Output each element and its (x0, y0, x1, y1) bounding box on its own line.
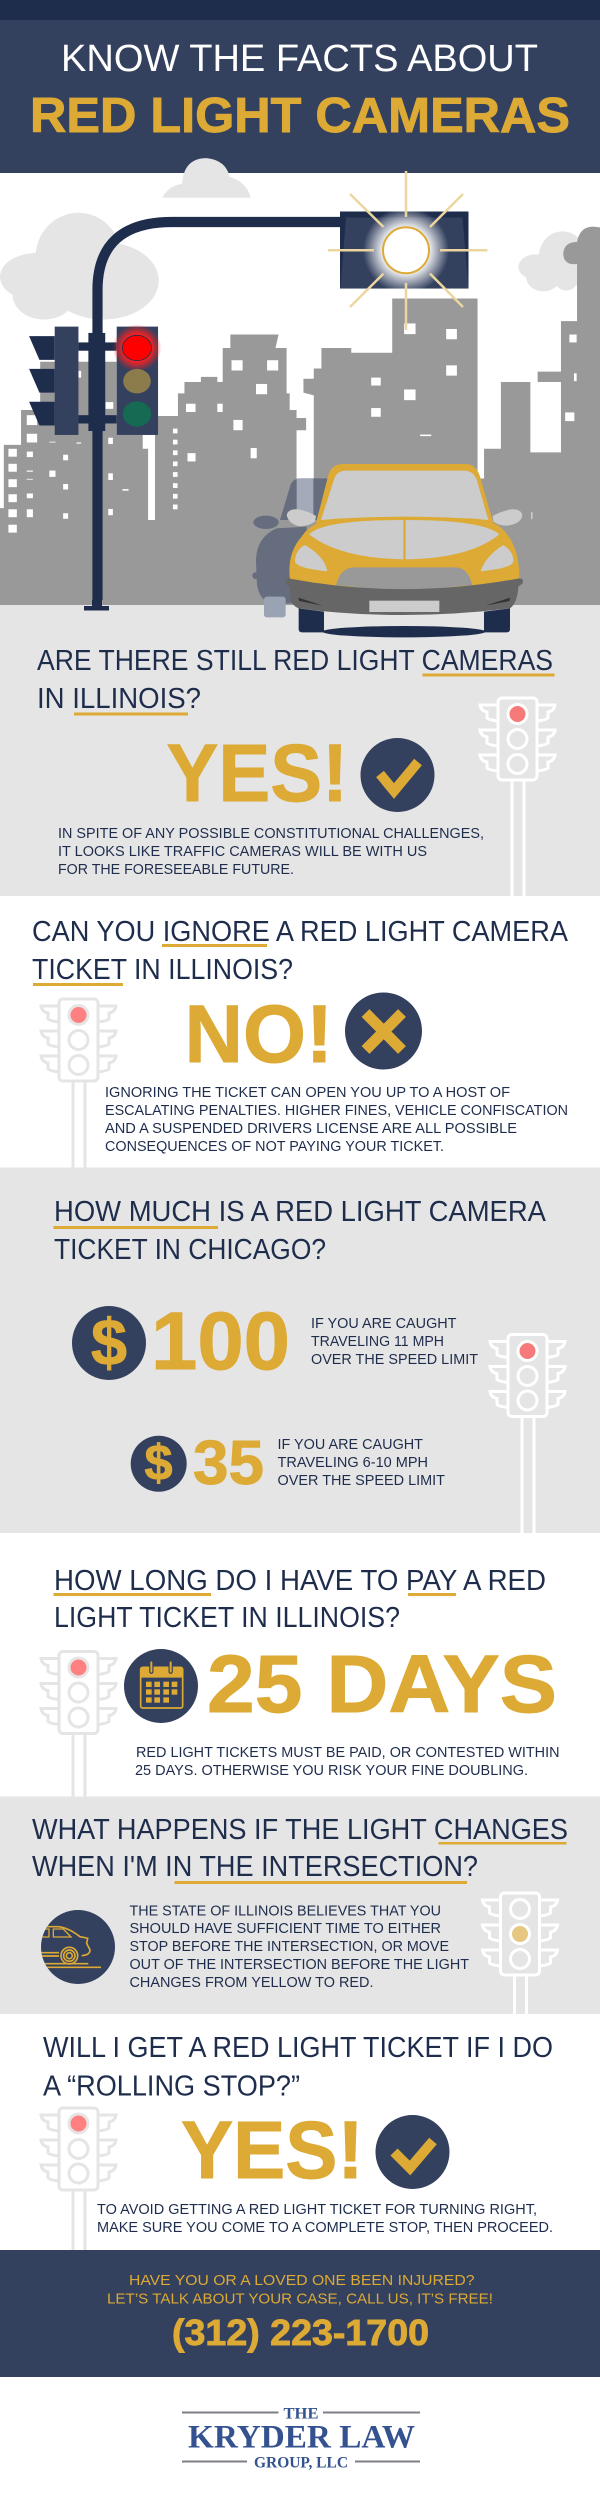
clouds and skyline (0, 158, 600, 605)
icon: traffic light outline (41, 1652, 116, 1796)
text block: escalating penalties (105, 1085, 568, 1155)
text block: complete stop: MAKE SURE YOU COME TO A COMPLETE STOP, THEN PROCEED. (97, 2220, 553, 2236)
icon: check mark (376, 2115, 450, 2189)
text block: risk fine doubling: RED LIGHT TICKETS MUST BE PAID, OR CONTESTED WITHIN (136, 1745, 560, 1761)
icon: traffic light outline (41, 2108, 116, 2250)
traffic signal (29, 324, 161, 435)
top band (0, 0, 600, 20)
call to action banner (0, 2250, 600, 2377)
text block: sufficient time: CHANGES FROM YELLOW TO RED. (130, 1975, 374, 1991)
heading: rolling stop (43, 2032, 553, 2102)
signal pole and arm (84, 222, 345, 610)
icon: x mark (345, 992, 422, 1070)
text block: 6-10 mph: TRAVELING 6-10 MPH (278, 1455, 428, 1471)
heading: light changes: WHEN I'M IN THE INTERSECTION? (32, 1851, 478, 1883)
heading: how much (54, 1196, 546, 1266)
text block: sufficient time (130, 1904, 469, 1991)
heading: are there still red light cameras (37, 645, 554, 716)
heading: light changes: WHAT HAPPENS IF THE LIGHT CHANGES (32, 1814, 568, 1846)
callout text: LET’S TALK ABOUT YOUR CASE, CALL US, IT’S FREE! (107, 2290, 493, 2308)
camera with flash (328, 171, 488, 330)
callout text (107, 2272, 493, 2308)
icon: calendar (124, 1649, 198, 1723)
car (252, 464, 523, 637)
callout text: HAVE YOU OR A LOVED ONE BEEN INJURED? (129, 2272, 474, 2289)
text block: risk fine doubling: 25 DAYS. OTHERWISE YOU RISK YOUR FINE DOUBLING. (135, 1763, 528, 1779)
text block: escalating penalties: AND A SUSPENDED DRIVERS LICENSE ARE ALL POSSIBLE (105, 1121, 517, 1137)
text block: risk fine doubling (135, 1745, 560, 1779)
panel: rolling stop (0, 2014, 600, 2250)
text block: constitutional challenges: FOR THE FORESEEABLE FUTURE. (58, 862, 294, 878)
text block: complete stop: TO AVOID GETTING A RED LIGHT TICKET FOR TURNING RIGHT, (97, 2202, 537, 2218)
answer: yes: YES! (166, 728, 348, 819)
panel: are there still red light cameras (0, 603, 600, 896)
text block: sufficient time: OUT OF THE INTERSECTION BEFORE THE LIGHT (130, 1957, 469, 1973)
panel: how long to pay (0, 1533, 600, 1796)
text block: 11 mph (311, 1316, 478, 1368)
amount: 100: 100 (151, 1296, 290, 1387)
title line 1: KNOW THE FACTS ABOUT (61, 38, 538, 80)
panel: how much is a ticket (0, 1168, 600, 1534)
icon: dollar large (72, 1305, 146, 1380)
phone number: (312) 223-1700 (172, 2312, 429, 2353)
icon: dollar large: $ (91, 1305, 127, 1379)
logo: the kryder law group: THE (284, 2406, 318, 2422)
title line 2: RED LIGHT CAMERAS (30, 89, 570, 143)
amount: 25 days: 25 DAYS (207, 1639, 557, 1730)
heading: how much: TICKET IN CHICAGO? (54, 1234, 326, 1266)
logo: the kryder law group: GROUP, LLC (254, 2454, 348, 2472)
icon: dollar small (131, 1435, 187, 1492)
heading: how much: HOW MUCH IS A RED LIGHT CAMERA (54, 1196, 546, 1228)
header banner (0, 20, 600, 173)
heading: rolling stop: A “ROLLING STOP?” (43, 2070, 300, 2102)
icon: traffic light outline (480, 698, 555, 896)
icon: car in circle (38, 1910, 115, 1984)
text block: escalating penalties: ESCALATING PENALTIES. HIGHER FINES, VEHICLE CONFISCATION (105, 1103, 568, 1119)
scene: city street illustration (0, 158, 600, 637)
heading: how long: HOW LONG DO I HAVE TO PAY A RED (54, 1565, 546, 1597)
text block: 11 mph: OVER THE SPEED LIMIT (311, 1352, 478, 1368)
panel: can you ignore a ticket (0, 896, 600, 1168)
answer: yes: YES! (181, 2105, 364, 2196)
text block: 11 mph: IF YOU ARE CAUGHT (311, 1316, 457, 1332)
icon: check mark (360, 738, 434, 812)
text block: constitutional challenges: IT LOOKS LIKE TRAFFIC CAMERAS WILL BE WITH US (58, 844, 427, 860)
heading: how long: LIGHT TICKET IN ILLINOIS? (54, 1602, 400, 1634)
heading: light changes (32, 1814, 568, 1884)
heading: rolling stop: WILL I GET A RED LIGHT TICKET IF I DO (43, 2032, 553, 2064)
heading: can you ignore: TICKET IN ILLINOIS? (32, 954, 293, 986)
text block: escalating penalties: IGNORING THE TICKET CAN OPEN YOU UP TO A HOST OF (105, 1085, 510, 1101)
heading: are there still red light cameras: ARE THERE STILL RED LIGHT CAMERAS (37, 645, 553, 677)
text block: sufficient time: STOP BEFORE THE INTERSECTION, OR MOVE (130, 1939, 449, 1955)
text block: constitutional challenges (58, 826, 484, 878)
heading: are there still red light cameras: IN ILLINOIS? (37, 683, 201, 715)
text block: constitutional challenges: IN SPITE OF ANY POSSIBLE CONSTITUTIONAL CHALLENGES, (58, 826, 484, 842)
answer: no: NO! (184, 989, 333, 1080)
icon: traffic light outline (41, 999, 116, 1168)
icon: traffic light outline yellow (482, 1893, 558, 2014)
text block: sufficient time: THE STATE OF ILLINOIS BELIEVES THAT YOU (130, 1904, 441, 1920)
heading: can you ignore (32, 916, 568, 986)
text block: 6-10 mph: IF YOU ARE CAUGHT (278, 1437, 423, 1453)
heading: how long (54, 1565, 546, 1634)
text block: 6-10 mph (278, 1437, 445, 1489)
text block: 11 mph: TRAVELING 11 MPH (311, 1334, 444, 1350)
heading: can you ignore: CAN YOU IGNORE A RED LIGHT CAMERA (32, 916, 568, 948)
text block: complete stop (97, 2202, 553, 2236)
icon: dollar small: $ (144, 1435, 173, 1491)
logo: the kryder law group: KRYDER LAW (188, 2420, 415, 2456)
text block: sufficient time: SHOULD HAVE SUFFICIENT TIME TO EITHER (130, 1921, 441, 1937)
panel: light changes in the intersection (0, 1796, 600, 2014)
icon: traffic light outline (490, 1334, 565, 1534)
text block: 6-10 mph: OVER THE SPEED LIMIT (278, 1473, 445, 1489)
amount: 35: 35 (193, 1429, 264, 1498)
logo: the kryder law group (182, 2406, 420, 2472)
text block: escalating penalties: CONSEQUENCES OF NOT PAYING YOUR TICKET. (105, 1139, 444, 1155)
